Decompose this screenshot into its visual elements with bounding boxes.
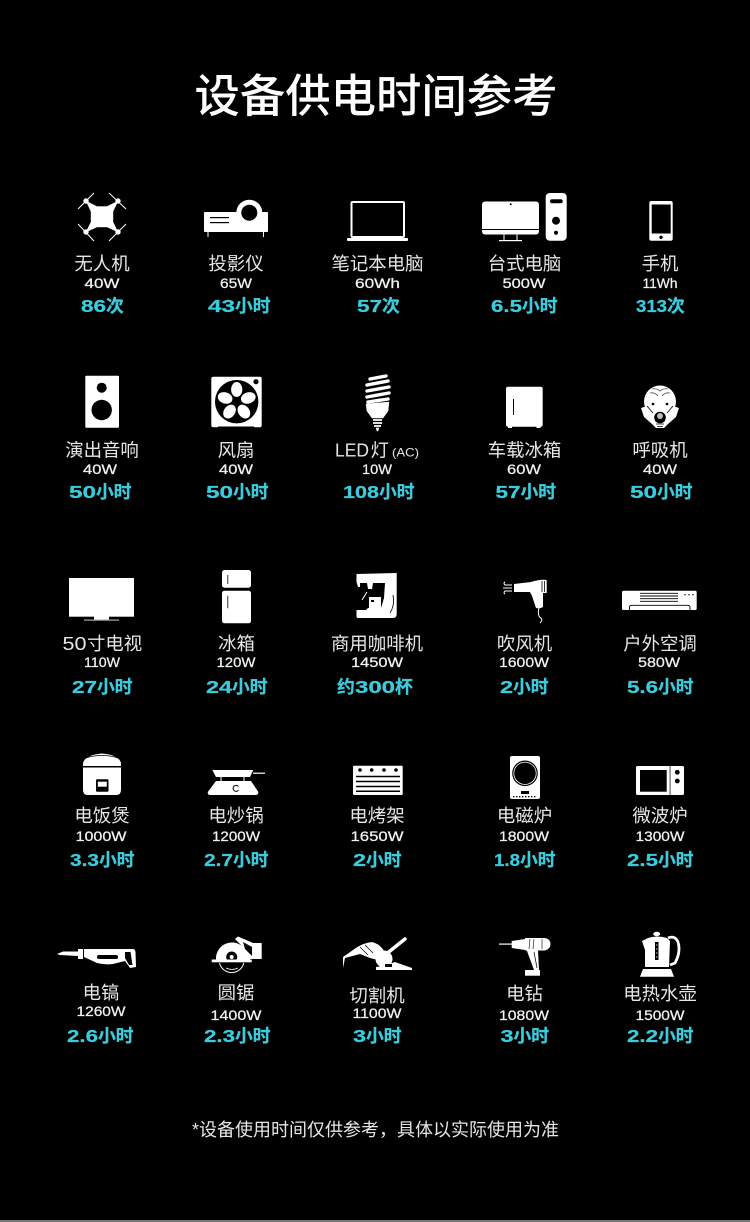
runtime: 3.3 <box>70 850 99 870</box>
runtime: 86 <box>81 296 106 316</box>
item: microwave <box>627 766 694 870</box>
icon: cutting machine <box>343 939 412 970</box>
name: 商用咖啡机 <box>331 633 423 654</box>
runtime: 小时 <box>97 677 133 697</box>
name: 电烤架 <box>349 805 405 826</box>
icon: coffee machine <box>356 573 397 618</box>
name: 风扇 <box>218 440 254 460</box>
item: speaker <box>65 376 139 502</box>
runtime: 27 <box>72 677 97 697</box>
name: 灯 <box>370 440 389 460</box>
runtime: 50 <box>630 482 657 502</box>
power: 10W <box>362 461 393 477</box>
name: 寸电视 <box>87 633 142 654</box>
item: induction cooker <box>494 756 556 870</box>
runtime: 小时 <box>522 296 558 316</box>
runtime: 小时 <box>235 296 271 316</box>
name: 电钻 <box>506 983 543 1004</box>
footnote: *设备使用时间仅供参考，具体以实际使用为准 <box>192 1120 559 1140</box>
item: wok <box>204 770 269 870</box>
runtime: 2.6 <box>67 1026 98 1046</box>
item: fan <box>206 377 269 502</box>
icon: oven <box>353 766 403 795</box>
runtime: 小时 <box>513 677 549 697</box>
name: 电炒锅 <box>208 805 264 826</box>
name: 电饭煲 <box>74 805 130 826</box>
item: circular saw <box>204 936 271 1046</box>
item: car fridge <box>488 387 561 502</box>
item: LED light <box>335 376 419 502</box>
item: drone <box>74 193 130 316</box>
power: 1080W <box>499 1007 550 1023</box>
icon: fan <box>211 377 262 428</box>
item: TV <box>62 578 142 697</box>
name: 电热水壶 <box>623 983 697 1004</box>
runtime: 108 <box>343 482 379 502</box>
runtime: 24 <box>206 677 232 697</box>
item: phone <box>636 201 685 316</box>
runtime: 约 <box>337 677 355 697</box>
icon: drill <box>499 938 550 976</box>
power: 1300W <box>636 828 685 844</box>
power: 580W <box>638 654 681 670</box>
name: 冰箱 <box>218 633 255 654</box>
power: 1260W <box>76 1003 126 1019</box>
runtime: 次 <box>106 296 124 316</box>
runtime: 次 <box>667 296 685 316</box>
icon: desktop computer <box>482 193 567 241</box>
name: LED <box>335 440 369 460</box>
runtime: 小时 <box>366 850 402 870</box>
name: 车载冰箱 <box>488 440 561 460</box>
name: 台式电脑 <box>488 253 561 274</box>
name: 电镐 <box>83 982 119 1003</box>
runtime: 小时 <box>658 677 694 697</box>
icon: car fridge <box>506 387 543 428</box>
runtime: 50 <box>206 482 233 502</box>
runtime: 小时 <box>366 1026 402 1046</box>
icon: induction cooker <box>510 756 540 799</box>
item: projector <box>204 200 271 316</box>
power: 1000W <box>76 828 127 844</box>
power: 60W <box>507 461 542 477</box>
item: drill <box>499 938 550 1046</box>
runtime: 杯 <box>395 677 413 697</box>
runtime: 小时 <box>520 850 556 870</box>
runtime: 3 <box>353 1026 366 1046</box>
power: 40W <box>83 461 118 477</box>
runtime: 2.3 <box>204 1026 235 1046</box>
runtime: 小时 <box>657 482 693 502</box>
runtime: 次 <box>382 296 400 316</box>
item: kettle <box>623 932 697 1046</box>
icon: projector <box>204 200 268 237</box>
icon: hair dryer <box>503 580 547 623</box>
power: 40W <box>643 461 678 477</box>
item: respirator <box>630 386 693 502</box>
icon: TV <box>69 578 134 621</box>
runtime: 小时 <box>96 482 132 502</box>
name: 户外空调 <box>623 633 697 654</box>
name: 电磁炉 <box>497 805 552 826</box>
runtime: 300 <box>355 677 395 697</box>
runtime: 小时 <box>99 850 135 870</box>
runtime: 小时 <box>98 1026 134 1046</box>
power: 60Wh <box>355 275 400 291</box>
icon: rice cooker <box>83 754 121 795</box>
power: 40W <box>84 275 120 291</box>
icon: laptop <box>347 202 408 241</box>
runtime: 小时 <box>514 1026 549 1046</box>
runtime: 2.7 <box>204 850 233 870</box>
icon: electric kettle <box>640 932 679 977</box>
title: 设备供电时间参考 <box>194 71 558 122</box>
runtime: 小时 <box>520 482 556 502</box>
power: 1200W <box>212 828 261 844</box>
name: 吹风机 <box>497 633 552 654</box>
item: desktop <box>482 193 567 316</box>
runtime: 1.8 <box>494 850 520 870</box>
power: 1450W <box>351 654 404 670</box>
power: 1500W <box>636 1007 685 1023</box>
icon: circular saw <box>212 936 262 973</box>
item: fridge <box>206 570 268 697</box>
power: 1400W <box>210 1007 262 1023</box>
icon: drone <box>78 193 126 241</box>
runtime: 小时 <box>658 1026 694 1046</box>
runtime: 小时 <box>233 850 269 870</box>
icon: speaker <box>85 376 119 428</box>
name: 微波炉 <box>632 805 688 826</box>
icon: phone <box>649 201 673 241</box>
power: 40W <box>219 461 254 477</box>
power: 500W <box>502 275 546 291</box>
runtime: 50 <box>69 482 96 502</box>
power: 120W <box>216 654 256 670</box>
runtime: 57 <box>357 296 382 316</box>
name: 演出音响 <box>65 440 139 460</box>
runtime: 43 <box>208 296 235 316</box>
power: 11Wh <box>642 275 678 291</box>
item: reciprocating saw <box>57 949 136 1046</box>
name: 笔记本电脑 <box>332 253 423 274</box>
runtime: 小时 <box>232 677 268 697</box>
icon: microwave <box>636 766 684 795</box>
power: 65W <box>220 275 253 291</box>
runtime: 小时 <box>658 850 694 870</box>
runtime: 2 <box>353 850 366 870</box>
runtime: 5.6 <box>627 677 658 697</box>
power: 1600W <box>499 654 550 670</box>
runtime: 2.5 <box>627 850 658 870</box>
icon: electric wok <box>208 770 265 795</box>
item: rice cooker <box>70 754 135 870</box>
power: 1100W <box>352 1005 402 1021</box>
runtime: 313 <box>636 296 667 316</box>
icon: reciprocating saw <box>57 949 136 968</box>
name: 切割机 <box>349 985 405 1006</box>
name: (AC) <box>392 446 419 460</box>
name: 投影仪 <box>208 253 264 274</box>
runtime: 2.2 <box>627 1026 658 1046</box>
icon: LED bulb <box>366 376 389 431</box>
icon: fridge <box>222 570 251 623</box>
runtime: 6.5 <box>491 296 522 316</box>
item: coffee machine <box>331 573 423 697</box>
item: outdoor AC <box>622 591 697 697</box>
item: laptop <box>332 202 423 316</box>
power: 110W <box>84 654 121 670</box>
runtime: 小时 <box>235 1026 271 1046</box>
runtime: 2 <box>500 677 513 697</box>
power: 1650W <box>350 828 404 844</box>
runtime: 小时 <box>233 482 269 502</box>
item: hair dryer <box>497 580 552 697</box>
item: oven <box>349 766 405 870</box>
item: cutter <box>343 939 412 1046</box>
runtime: 57 <box>496 482 521 502</box>
name: 50 <box>62 633 86 654</box>
name: 无人机 <box>74 253 130 274</box>
runtime: 小时 <box>379 482 415 502</box>
name: 呼吸机 <box>632 440 688 460</box>
icon: respirator mask <box>641 386 679 428</box>
icon: air conditioner <box>622 591 697 610</box>
runtime: 3 <box>500 1026 514 1046</box>
name: 手机 <box>642 253 678 274</box>
name: 圆锯 <box>218 982 254 1003</box>
power: 1800W <box>499 828 550 844</box>
